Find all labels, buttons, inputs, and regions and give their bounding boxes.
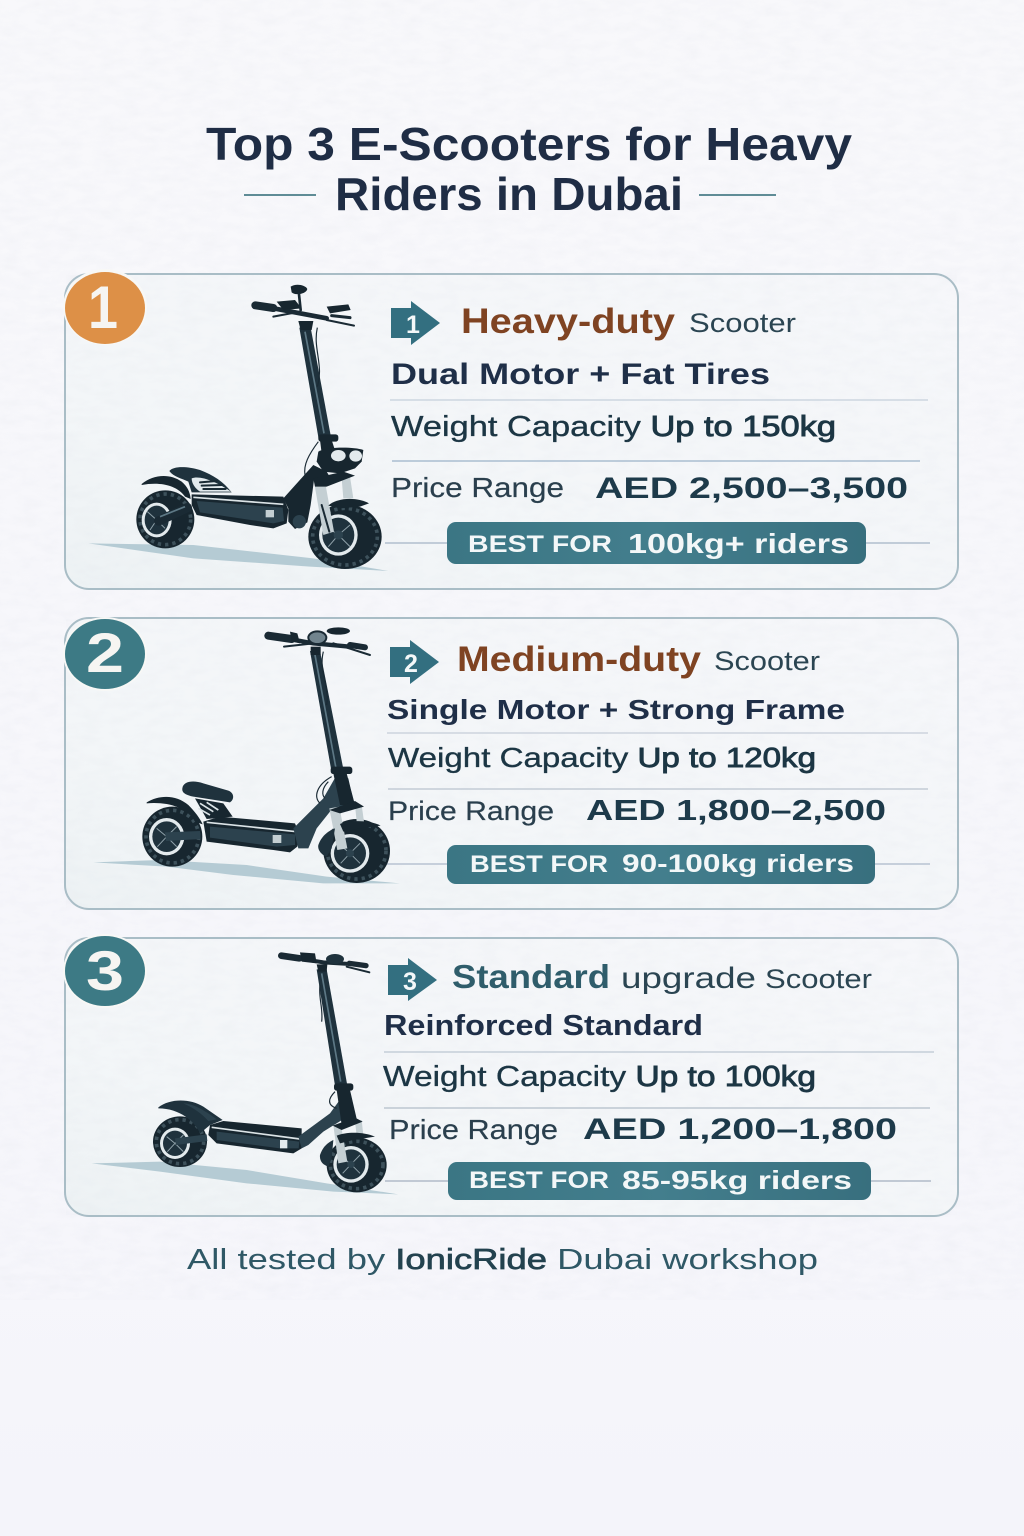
number badge 1: 1 [88,274,118,341]
scooter illustration 1 [88,285,388,571]
deck [208,1121,302,1153]
number badge 2: 2 [86,621,124,684]
price range [389,1113,897,1146]
title: Riders in Dubai [335,168,683,220]
best for pill [447,522,866,564]
weight capacity: Weight Capacity Up to 120kg [388,742,816,773]
heading: medium-duty: Medium-duty [457,640,702,679]
number badge 3 [63,934,147,1008]
best for pill: BEST FOR [468,531,612,558]
heading: standard upgrade [452,958,872,995]
forks [314,482,334,535]
heading: heavy-duty: Scooter [689,308,796,338]
price range: AED 1,200–1,800 [583,1113,897,1146]
best for pill: 90-100kg riders [622,850,854,878]
price range: AED 2,500–3,500 [595,472,908,505]
feature text: Dual Motor + Fat Tires [391,358,770,391]
headlights [317,448,363,473]
price range: Price Range [389,1114,558,1145]
heading: heavy-duty [461,302,796,341]
heading: standard upgrade: Standard [452,958,610,995]
scooter illustration 3 [92,952,398,1194]
stem [310,651,344,772]
price range: Price Range [391,472,564,503]
feature text: Reinforced Standard [384,1010,703,1042]
front wheel [323,819,390,883]
icon: arrow 2 [390,640,439,684]
front wheel [308,504,382,569]
stem [317,969,347,1086]
best for pill: BEST FOR [469,1167,609,1194]
neck [293,775,353,848]
heading: heavy-duty: Heavy-duty [461,302,676,341]
heading: medium-duty: Scooter [714,646,820,676]
icon: arrow 3: 3 [403,968,417,996]
best for pill: 85-95kg riders [622,1165,852,1195]
handlebar [273,308,327,318]
price range [388,795,886,827]
number badge 2 [63,617,147,691]
feature text: Single Motor + Strong Frame [387,694,845,725]
handlebar [298,958,350,964]
panel: standard upgrade scooter [63,934,958,1216]
rear wheel [136,490,194,548]
best for pill [447,845,875,884]
icon: arrow 2: 2 [404,650,418,678]
front wheel [327,1138,387,1192]
panel: medium-duty scooter [63,617,958,909]
weight capacity: Weight Capacity Up to 100kg [383,1061,816,1093]
icon: arrow 3 [388,958,437,1001]
deck [192,494,288,528]
title: Top 3 E-Scooters for Heavy [206,118,852,170]
price range: AED 1,800–2,500 [586,795,886,827]
stem [299,328,331,439]
heading: medium-duty [457,640,820,679]
neck [298,1095,352,1148]
number badge 1 [63,269,147,345]
best for pill: 100kg+ riders [628,528,849,559]
best for pill [448,1162,871,1200]
panel: heavy-duty scooter [63,269,958,589]
title [206,118,852,220]
best for pill: BEST FOR [470,851,608,878]
handlebar [290,639,350,647]
rear wheel [153,1116,207,1167]
number badge 3: 3 [86,939,124,1002]
scooter illustration 2 [93,627,400,883]
heading: standard upgrade: upgrade [621,962,756,995]
icon: arrow 1: 1 [406,311,420,339]
forks [329,807,347,850]
forks [333,1123,347,1163]
neck [283,465,331,529]
icon: arrow 1 [391,301,440,345]
price range [391,472,908,505]
rear wheel [142,807,202,867]
seat [182,782,233,819]
footer note: All tested by IonicRide Dubai workshop [187,1244,818,1276]
price range: Price Range [388,796,554,826]
weight capacity: Weight Capacity Up to 150kg [391,411,836,443]
heading: standard upgrade: Scooter [765,964,872,994]
deck [203,817,298,852]
